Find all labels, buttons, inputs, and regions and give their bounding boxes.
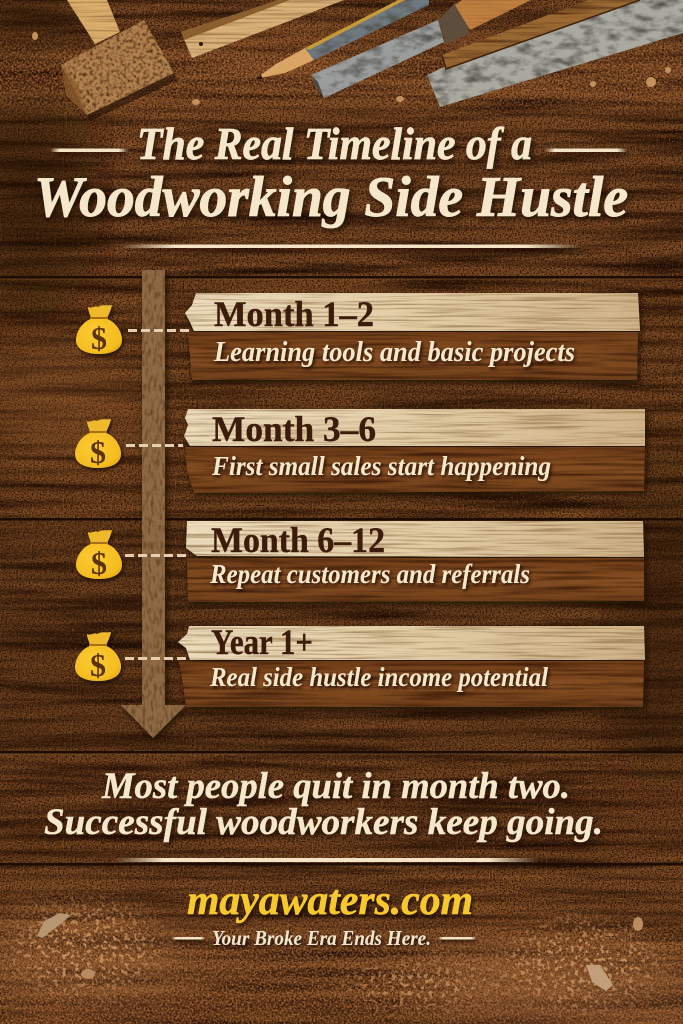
footer divider (113, 858, 540, 862)
icon: money bag: $ (91, 320, 107, 356)
message line 2: Successful woodworkers keep going. (44, 802, 603, 843)
plank: Month 1–2 (185, 293, 640, 380)
icon: money bag: $ (90, 647, 106, 683)
website url: mayawaters.com (187, 878, 473, 924)
icon: ruler (181, 0, 344, 58)
title line 2: Woodworking Side Hustle (34, 166, 628, 229)
icon: money bag: $ (90, 434, 106, 470)
heading: Month 6–12: Month 6–12 (211, 520, 385, 560)
plank: Year 1+ (178, 626, 645, 707)
plank: Month 6–12 (186, 521, 644, 602)
icon: money bag (76, 530, 122, 581)
icon: hand saw (427, 0, 683, 107)
title (34, 119, 628, 248)
heading: Month 3–6: Month 3–6 (212, 409, 376, 449)
icon: money bag (75, 419, 121, 470)
timeline step 4 (75, 622, 645, 707)
icon: money bag: $ (91, 545, 107, 581)
icon: money bag (76, 305, 122, 356)
heading: Year 1+: Year 1+ (211, 622, 313, 662)
title underline (120, 244, 582, 248)
connector dashes (125, 554, 186, 557)
description: Month 3–6: First small sales start happening (211, 451, 551, 481)
connector dashes (126, 444, 183, 447)
timeline step 2 (75, 409, 645, 493)
icon: chisel (311, 0, 531, 98)
plank: Month 3–6 (184, 409, 645, 493)
message line 1: Most people quit in month two. (101, 766, 570, 807)
closing message (44, 766, 603, 843)
icon: mallet (61, 0, 178, 121)
icon: pencil (255, 0, 429, 79)
title line 1: The Real Timeline of a (137, 119, 532, 169)
icon: money bag (75, 632, 121, 683)
description: Month 6–12: Repeat customers and referrals (209, 559, 530, 589)
timeline arrow (121, 270, 186, 738)
tools illustration (32, 0, 683, 121)
heading: Month 1–2: Month 1–2 (214, 294, 374, 334)
tagline rule right (438, 937, 476, 940)
timeline step 1 (76, 293, 640, 380)
tagline rule left (172, 937, 205, 940)
sawdust large chips (37, 913, 643, 991)
description: Year 1+: Real side hustle income potential (209, 662, 548, 692)
connector dashes (125, 657, 186, 660)
description: Month 1–2: Learning tools and basic projects (213, 336, 575, 368)
sawdust chips top (32, 32, 671, 105)
title decorative rule left (50, 148, 128, 152)
title decorative rule right (545, 148, 627, 152)
timeline step 3 (76, 520, 644, 602)
tagline text: Your Broke Era Ends Here. (212, 926, 431, 950)
connector dashes (128, 329, 190, 332)
